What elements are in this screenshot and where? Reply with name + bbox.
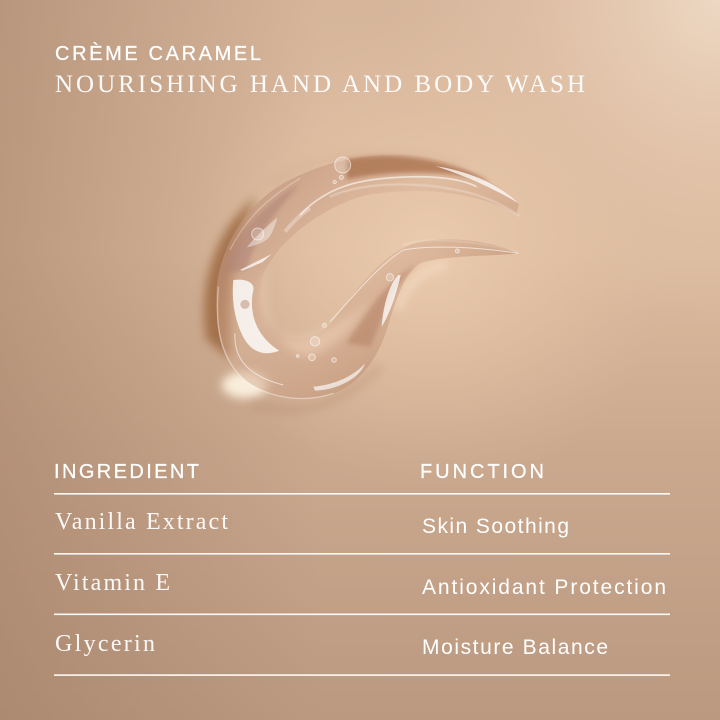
table rules <box>54 493 670 676</box>
product subtitle: NOURISHING HAND AND BODY WASH <box>55 71 585 98</box>
column heading: function: FUNCTION <box>420 461 544 483</box>
gel bubbles <box>240 157 459 362</box>
row: glycerin <box>55 631 608 659</box>
row: vitamin e: Vitamin E <box>55 570 170 596</box>
row: vitamin e: Antioxidant Protection <box>422 576 666 599</box>
gel inner shading <box>223 156 490 357</box>
gel highlights <box>217 166 520 398</box>
row: glycerin: Glycerin <box>55 631 155 657</box>
gel cast shadow and glow <box>204 153 463 409</box>
row: vanilla extract <box>55 509 569 538</box>
column heading: ingredient: INGREDIENT <box>54 461 199 483</box>
illustration: clear gel swirl <box>204 153 520 409</box>
title block <box>55 42 585 98</box>
gel body <box>216 155 520 398</box>
row: vitamin e <box>55 570 666 599</box>
row: glycerin: Moisture Balance <box>422 636 608 659</box>
row: vanilla extract: Vanilla Extract <box>55 509 228 535</box>
ingredient table <box>54 461 670 676</box>
product name: CRÈME CARAMEL <box>55 42 261 65</box>
row: vanilla extract: Skin Soothing <box>422 515 569 538</box>
